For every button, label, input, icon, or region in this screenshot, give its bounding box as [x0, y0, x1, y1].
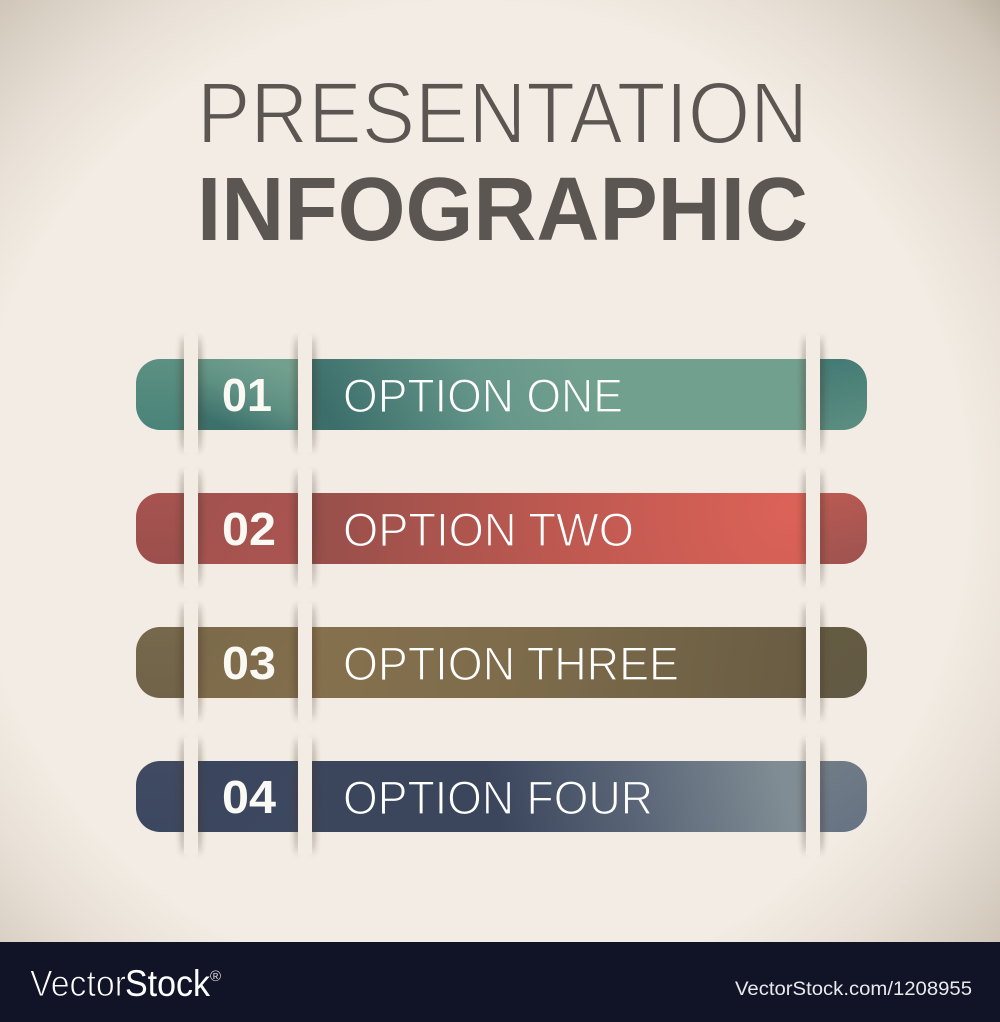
registered mark: ®	[210, 968, 221, 985]
main band	[312, 493, 806, 564]
title line: infographic: INFOGRAPHIC	[197, 160, 808, 260]
left cap	[136, 627, 184, 698]
option row 1	[136, 335, 867, 453]
slit shadows	[180, 603, 824, 721]
option row 4	[136, 737, 867, 855]
footer band	[0, 942, 1000, 1022]
footer background	[0, 942, 1000, 1022]
label: OPTION ONE	[343, 369, 623, 422]
label: OPTION TWO	[343, 503, 634, 556]
slit shadows	[180, 737, 824, 855]
option row 3	[136, 603, 867, 721]
title	[197, 65, 808, 260]
logo word: vector: Vector	[30, 963, 126, 1004]
right cap	[820, 761, 867, 832]
slit shadows	[180, 335, 824, 453]
footer logo	[30, 963, 221, 1004]
slit shadows	[180, 469, 824, 587]
number tab	[198, 359, 298, 430]
number tab	[198, 627, 298, 698]
number: 01	[222, 369, 272, 421]
label: OPTION FOUR	[343, 771, 653, 824]
right cap	[820, 493, 867, 564]
option row 2	[136, 469, 867, 587]
number tab	[198, 761, 298, 832]
number: 03	[222, 637, 276, 689]
label: OPTION THREE	[343, 637, 679, 690]
title line: presentation: PRESENTATION	[197, 65, 808, 162]
left cap	[136, 761, 184, 832]
right cap	[820, 359, 867, 430]
left cap	[136, 359, 184, 430]
right cap	[820, 627, 867, 698]
footer image id: VectorStock.com/1208955	[735, 978, 972, 1000]
logo word: stock: Stock	[125, 963, 210, 1004]
main band	[312, 359, 806, 430]
number tab	[198, 493, 298, 564]
main band	[312, 627, 806, 698]
left cap	[136, 493, 184, 564]
number: 04	[222, 771, 276, 823]
number: 02	[222, 503, 276, 555]
main band	[312, 761, 806, 832]
